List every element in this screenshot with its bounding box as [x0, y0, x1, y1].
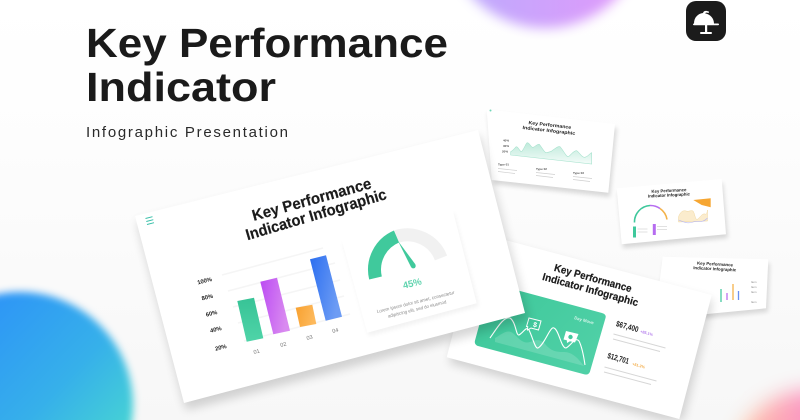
tiny labels: Type 02 — [536, 167, 547, 171]
tiny labels: 40% — [503, 138, 509, 142]
needle — [398, 241, 416, 268]
gauge panel — [342, 210, 479, 336]
heading: main title: Indicator — [86, 64, 276, 110]
slide title: Key Performance — [250, 175, 374, 225]
legend: Item — [751, 285, 757, 289]
slide title: Indicator Infographic — [693, 265, 737, 272]
thin bars — [721, 284, 738, 302]
slide title — [648, 187, 691, 199]
slide title: Key Performance — [553, 262, 633, 295]
blob: blue — [0, 280, 148, 420]
stat: 67,400 — [613, 319, 666, 352]
panel: main slide — [135, 130, 529, 410]
slide title: Indicator Infographic — [522, 125, 576, 137]
panel: green wave slide — [447, 233, 713, 420]
percent: 45% — [402, 276, 423, 292]
slide title: Indicator Infographic — [244, 186, 389, 244]
x axis labels: 01 — [253, 349, 260, 356]
tiny labels: 30% — [503, 144, 509, 148]
icon: menu — [146, 217, 154, 224]
tiny labels: Type 01 — [498, 162, 509, 166]
legend: Item — [751, 300, 757, 304]
tiny labels: 20% — [502, 150, 508, 154]
y axis labels — [197, 277, 227, 353]
subtitle: Infographic Presentation — [86, 124, 288, 141]
y axis labels: 80% — [201, 294, 214, 302]
legend — [751, 280, 757, 304]
slide title — [522, 120, 576, 137]
heading: main title — [86, 20, 448, 110]
panel: bar slide — [655, 257, 770, 323]
stat: 12,701: $12,701 — [606, 351, 630, 366]
orange shape — [693, 198, 711, 207]
panel: line chart slide — [487, 109, 617, 197]
bar chart — [237, 255, 342, 342]
stat: 12,701 — [604, 351, 656, 384]
slide title — [693, 261, 737, 272]
rainbow gauge — [634, 205, 667, 222]
panel: gauge slide — [617, 179, 728, 248]
x axis labels: 03 — [306, 335, 313, 342]
y axis labels: 40% — [210, 326, 222, 335]
x axis labels: 02 — [280, 342, 287, 349]
icon: dollar bubble — [526, 318, 541, 330]
description: Lorem ipsum dolor sit amet, consectetur — [376, 290, 455, 314]
legend: Item — [751, 290, 757, 294]
blob: purple — [466, 0, 625, 36]
wave chart — [490, 318, 585, 366]
slide title: Indicator Infographic — [648, 191, 691, 199]
icon: dollar bubble: $ — [532, 322, 538, 329]
slide title: Key Performance — [528, 120, 572, 131]
gauge — [375, 235, 441, 278]
area chart — [678, 210, 708, 222]
y axis labels: 20% — [215, 344, 227, 353]
heading: main title: Key Performance — [86, 20, 448, 66]
slide title: Key Performance — [651, 187, 687, 194]
tiny text lines — [498, 168, 592, 182]
legend: Item — [751, 280, 757, 284]
stat: 67,400: $67,400 — [615, 319, 640, 334]
tiny labels — [498, 138, 584, 175]
chart grid — [222, 248, 350, 341]
description: adipiscing elit, sed do eiusmod — [387, 299, 447, 319]
stat tiles — [633, 226, 636, 238]
icon: photo bubble — [564, 331, 578, 343]
label: day move: Day Move — [574, 315, 595, 325]
stat: 67,400: +85.1% — [640, 330, 654, 337]
x axis labels: 04 — [332, 328, 339, 335]
y axis labels: 100% — [197, 277, 213, 286]
tiny labels: Type 03 — [573, 171, 584, 175]
slide title: Indicator Infographic — [541, 271, 640, 309]
x axis labels — [253, 328, 339, 356]
stat: 12,701: +51.2% — [632, 362, 646, 370]
area chart — [511, 143, 592, 164]
slide title: Key Performance — [697, 261, 734, 267]
blob: coral — [734, 378, 800, 420]
y axis labels: 60% — [205, 310, 218, 319]
green card — [475, 284, 606, 375]
icon: keynote app — [686, 1, 726, 41]
